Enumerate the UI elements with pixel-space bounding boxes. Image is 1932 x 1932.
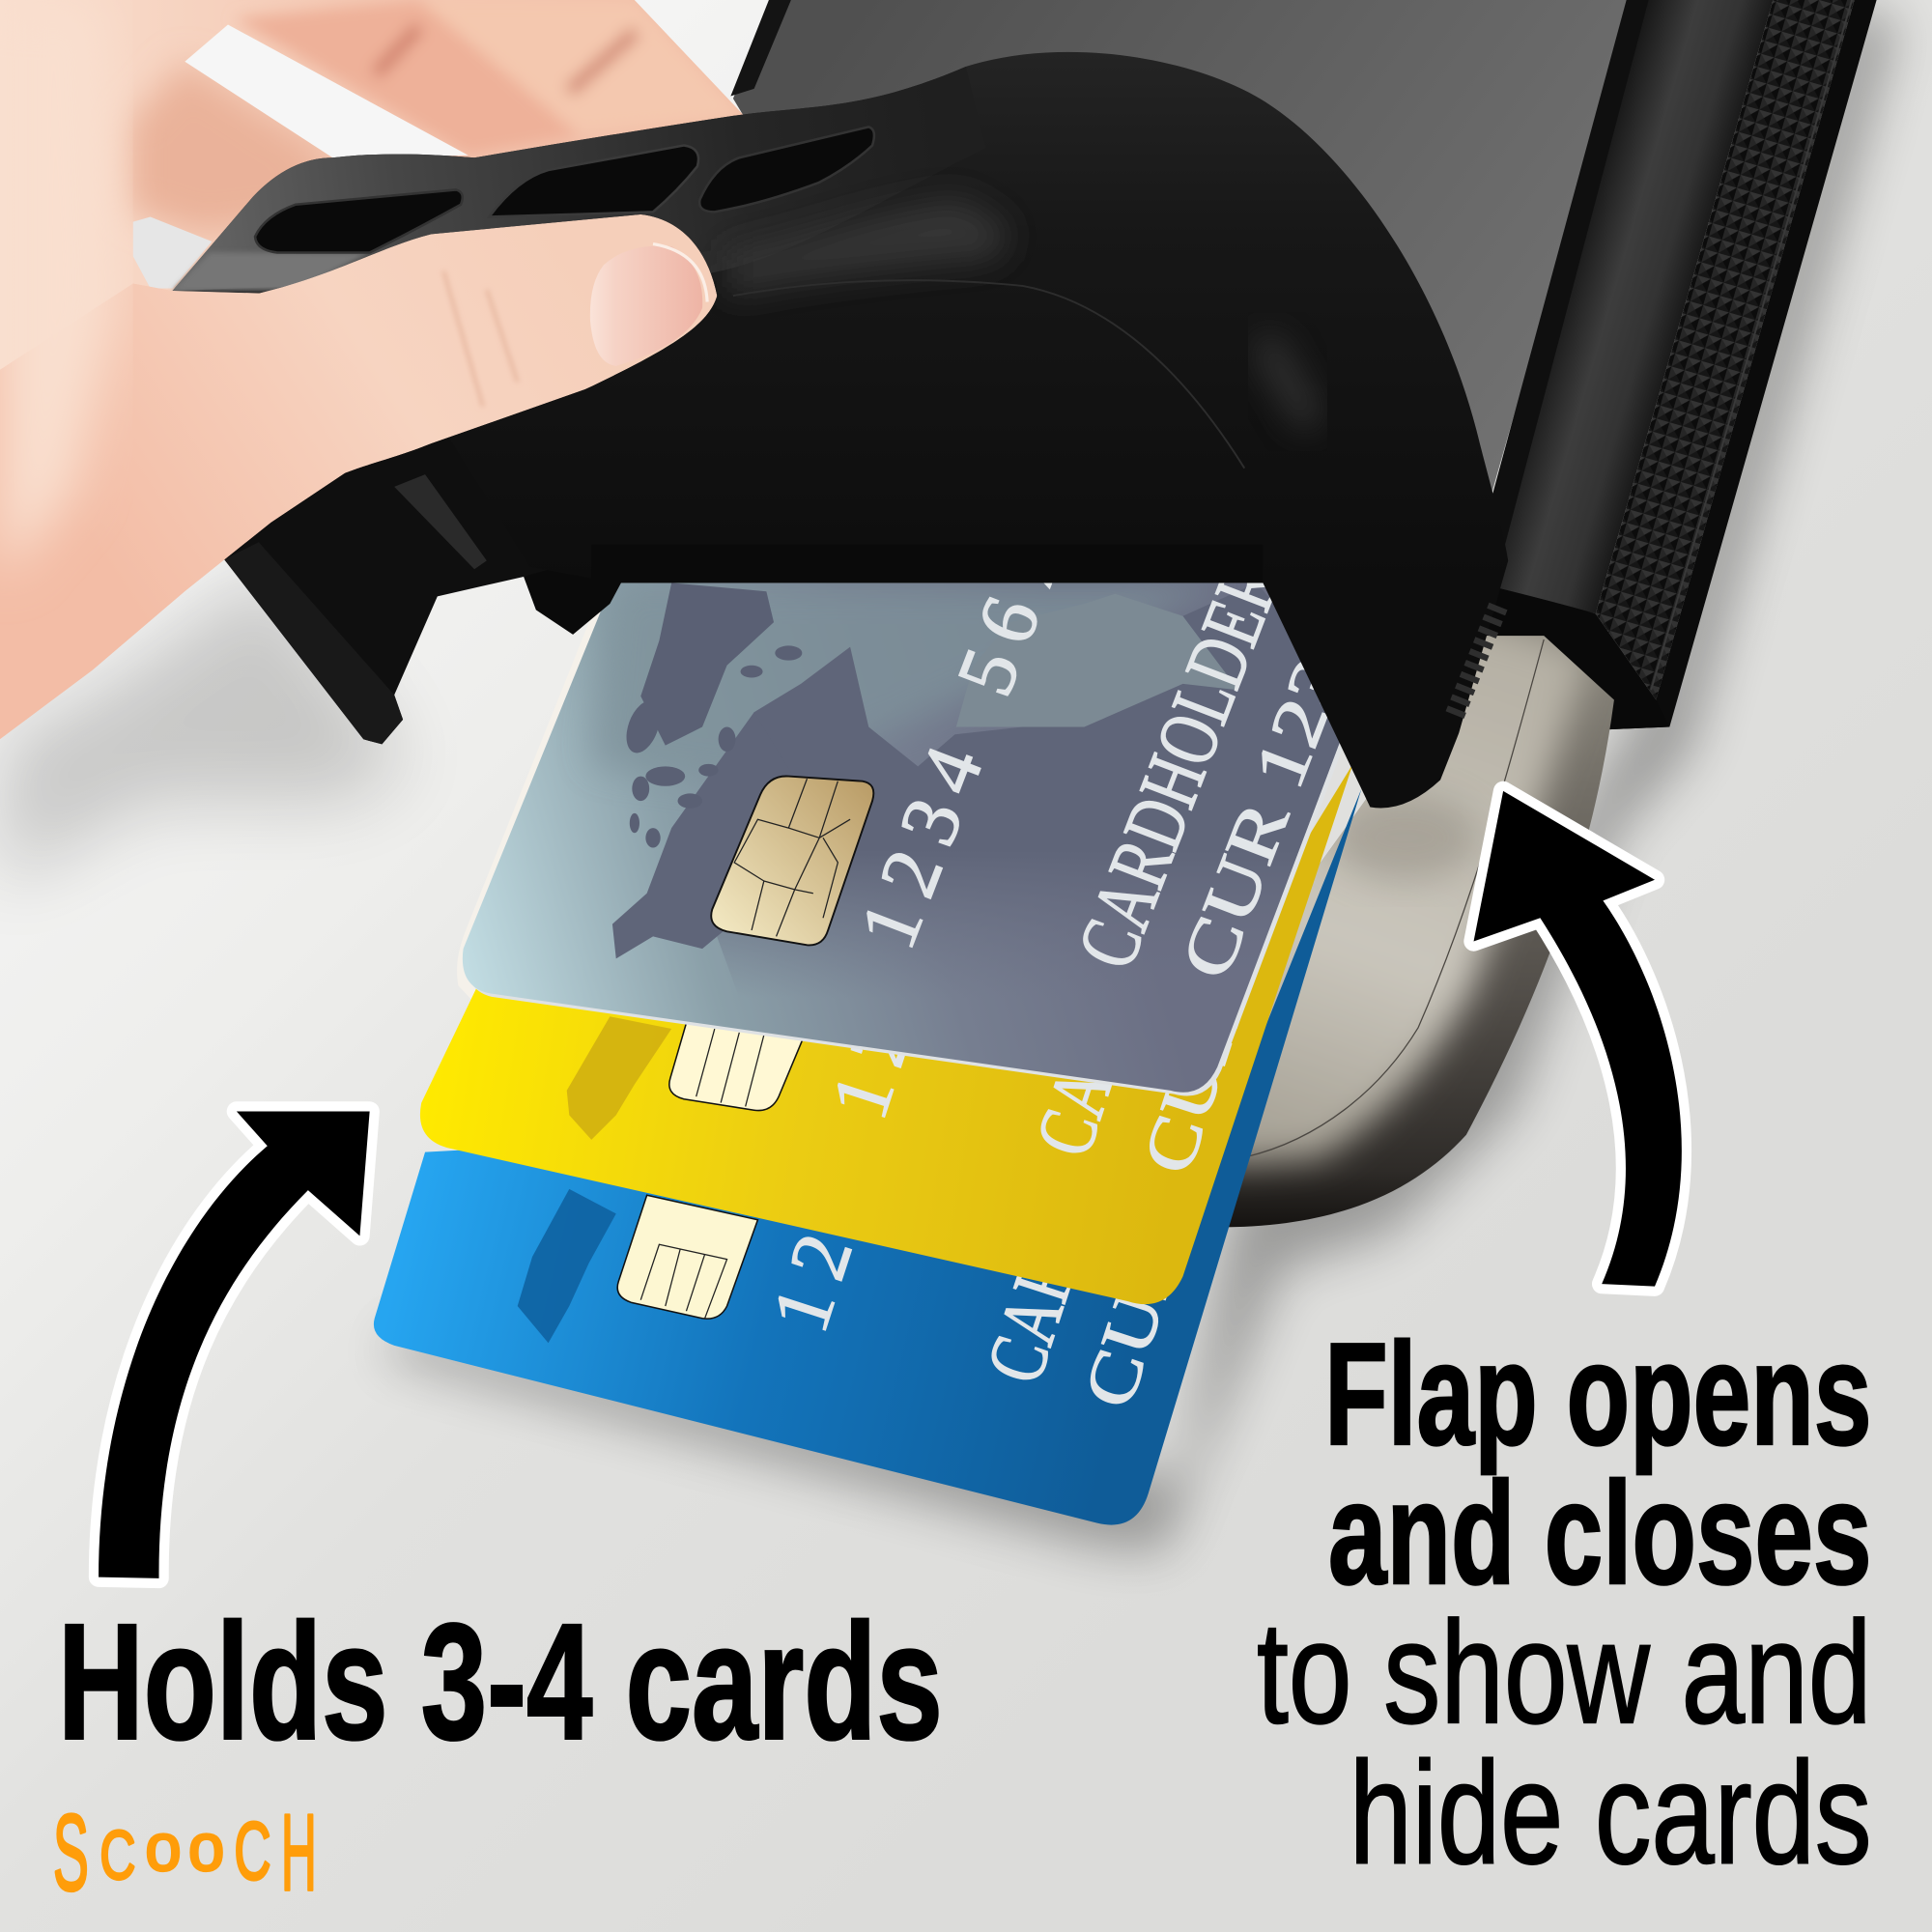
yellow card number: 1234 — [814, 891, 968, 1129]
blue card currency: CUR 1234 — [1069, 1053, 1255, 1417]
soft drop shadows — [0, 0, 1897, 1552]
blue card number: 1234 — [755, 1104, 909, 1343]
hand front with thumb — [0, 214, 717, 739]
yellow card chip — [668, 1024, 803, 1111]
titanium case bottom — [457, 589, 1614, 1227]
logo: Scooch: C — [99, 1817, 135, 1894]
grip hole two — [489, 146, 698, 216]
grey card number: 12345678 — [842, 468, 1103, 960]
knurled band — [1596, 0, 1855, 699]
black flap with grip — [173, 52, 1508, 808]
heading: holds 3-4 cards: Holds 3-4 cards — [58, 1590, 943, 1775]
logo: Scooch — [53, 1792, 317, 1914]
logo: Scooch: C — [234, 1805, 271, 1896]
yellow card map — [567, 1016, 671, 1140]
grey card currency: CUR 1234 5678 — [1166, 420, 1448, 989]
grip hole one — [255, 189, 463, 252]
product infographic scene: H — [281, 1792, 317, 1914]
logo: Scooch: o — [188, 1810, 224, 1885]
grey card chip — [711, 776, 873, 945]
yellow credit card — [420, 740, 1353, 1304]
grip hole three — [699, 127, 874, 212]
background gaps between fingers — [133, 25, 469, 288]
blue card chip — [617, 1195, 757, 1319]
logo: Scooch: o — [146, 1810, 181, 1885]
yellow card holder: CARDHOLDER — [1019, 740, 1234, 1166]
logo: Scooch: S — [53, 1792, 89, 1914]
blue card map — [518, 1189, 616, 1343]
flap knurled edge — [1454, 607, 1498, 717]
blue credit card — [374, 788, 1361, 1525]
thumbnail — [590, 246, 702, 366]
arrow: holds cards — [99, 1112, 370, 1578]
blue card holder: CARDHOLDER — [970, 966, 1184, 1393]
yellow card currency: CUR 1234 — [1128, 819, 1314, 1183]
arrow: flap opens — [1474, 791, 1682, 1287]
side rail with knurled grip — [1466, 0, 1877, 729]
text block: flap description — [1257, 1313, 1872, 1894]
hand behind the flap — [0, 0, 747, 394]
grey credit card — [462, 583, 1340, 1095]
phone screen back — [730, 0, 1633, 518]
lower clip leg of flap — [224, 370, 640, 744]
grey card map — [612, 582, 1346, 998]
grey card holder: CARDHOLDER — [1059, 550, 1298, 980]
pale palm blend — [0, 0, 117, 579]
